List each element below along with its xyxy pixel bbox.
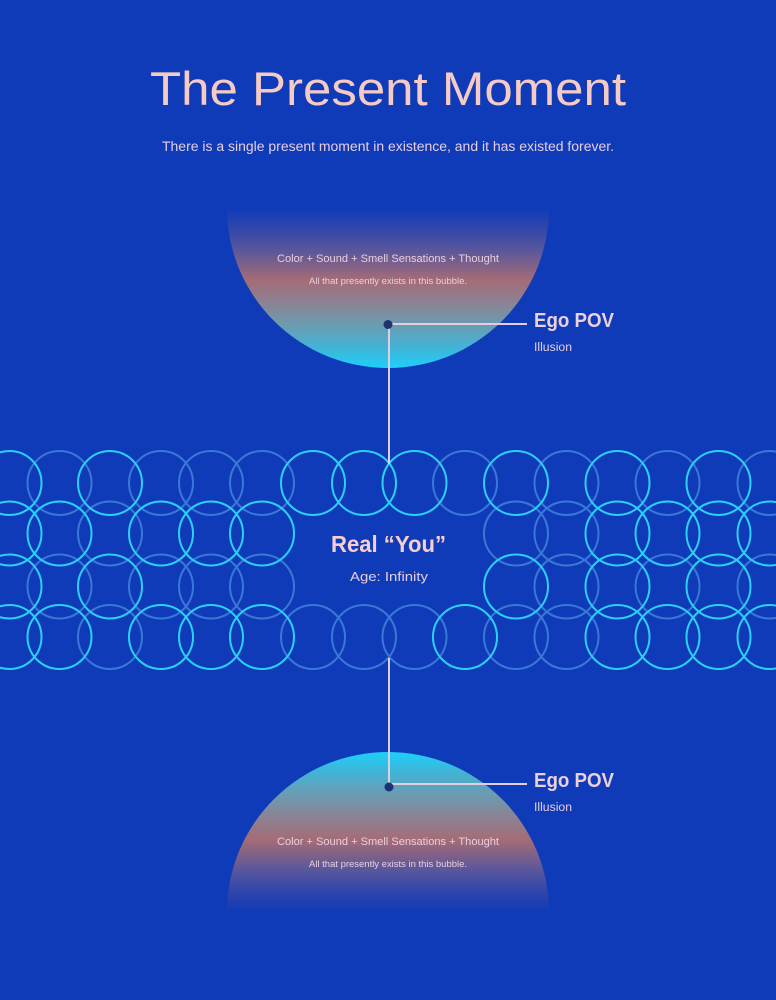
bright circles [0,451,776,669]
top bubble heading: Color + Sound + Smell Sensations + Thought [277,253,499,265]
bottom label: Illusion: Illusion [534,802,572,814]
title: The Present Moment [150,62,626,115]
top connector dot [384,320,392,329]
subtitle: There is a single present moment in existence, and it has existed forever. [162,139,614,154]
bottom bubble heading: Color + Sound + Smell Sensations + Thought [277,836,499,848]
bottom connector dot [384,782,394,792]
top bubble caption: All that presently exists in this bubble. [309,276,467,286]
center label: Real You: Real “You” [331,531,446,557]
bottom bubble [227,752,549,912]
bottom label: Ego POV: Ego POV [534,770,615,792]
center label: Age: Age: Infinity [350,569,429,584]
top label: Ego POV: Ego POV [534,310,615,332]
bottom connector lines [389,658,527,787]
top bubble [227,208,549,368]
dim circles [28,451,776,669]
bottom bubble caption: All that presently exists in this bubble. [309,859,467,869]
circle lattice band [0,451,776,669]
top label: Illusion: Illusion [534,342,572,354]
top connector lines [389,324,527,464]
